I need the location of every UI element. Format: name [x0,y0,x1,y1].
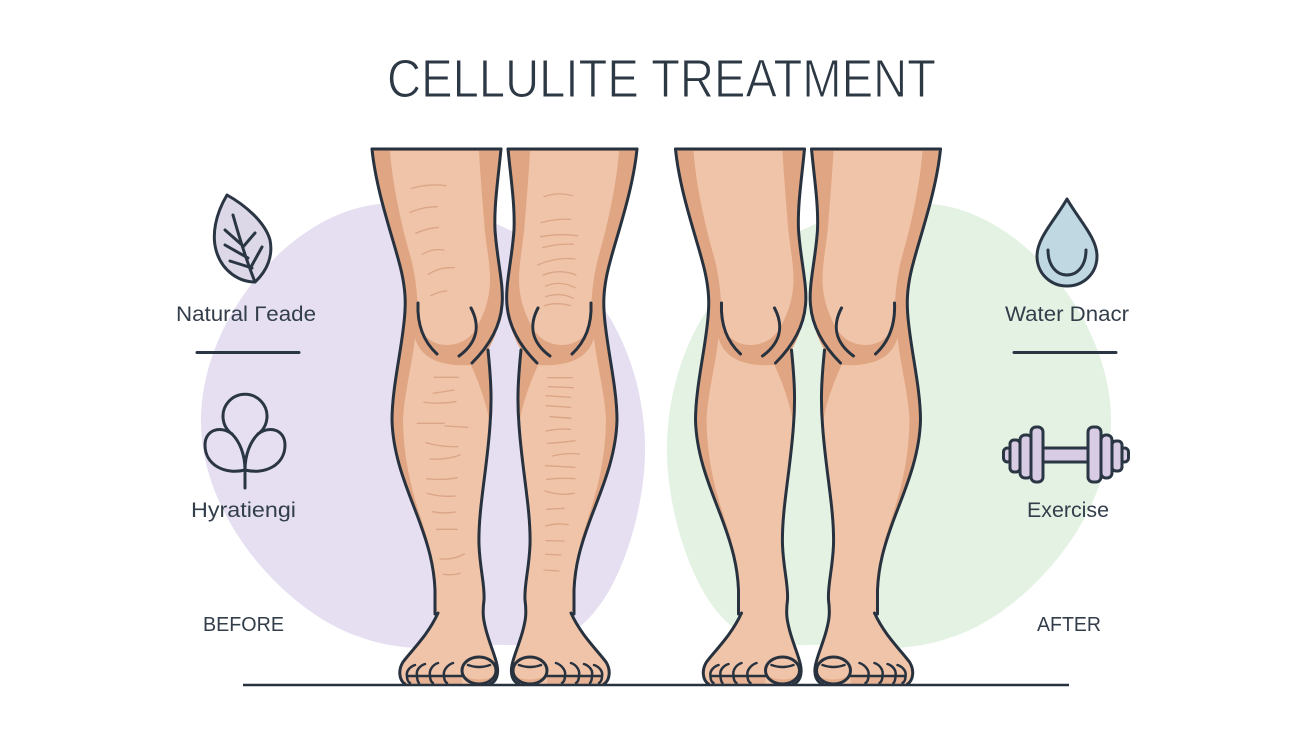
ground line [243,684,1069,686]
legs: before treatment [372,149,637,684]
purple background circle [201,203,645,649]
label: after: AFTER [1037,614,1101,636]
icon: dumbbell [1004,427,1128,482]
label: water: Water Dnacr [1005,303,1129,326]
legs: after treatment [676,149,940,684]
label: natural: Natural Гeade [176,303,316,326]
divider: left [197,351,299,354]
icon: water drop [1037,199,1097,286]
label: hydrating: Hyratiengi [191,499,296,522]
icon: three-lobed plant [205,394,285,488]
icon: leaf [214,195,271,282]
green background circle [667,203,1111,649]
title: CELLULITE TREATMENT [387,49,936,109]
label: exercise: Exercise [1027,499,1109,522]
divider: right [1014,351,1116,354]
label: before: BEFORE [203,614,284,636]
